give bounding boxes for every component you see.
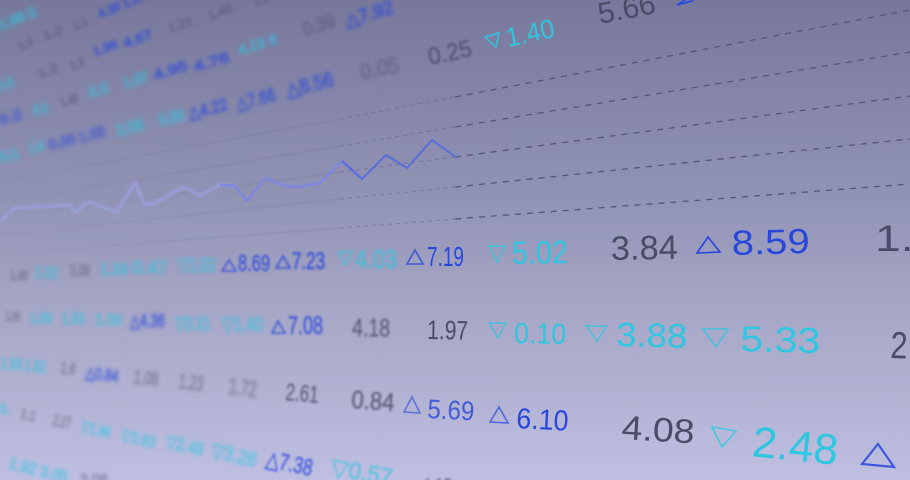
data row 3: 2.48 [750, 418, 841, 475]
second rising row: 2.2 [86, 79, 110, 100]
data row 5 [7, 455, 108, 480]
top row sharp values: 0.39 [157, 107, 186, 130]
second rising row [0, 0, 396, 128]
data row 2: 5.33 [740, 318, 821, 361]
data row 4: ▽3.26 [209, 440, 259, 472]
top row sharp values [0, 0, 698, 165]
top row sharp values: △7.66 [234, 85, 278, 114]
top row sharp values: △8.56 [284, 69, 336, 102]
third rising row: 1.3 [68, 55, 86, 73]
data row 4: ▽1.96 [79, 418, 112, 442]
trend guide lines [0, 10, 910, 254]
third rising row: 1.21 [166, 14, 195, 36]
data row 1: 8.59 [731, 222, 810, 263]
data row 3: 0.84 [351, 386, 396, 417]
data row 4: 5. [0, 401, 10, 417]
data row 2: 0.10 [514, 318, 566, 351]
data row 4: 2.27 [51, 412, 72, 433]
top row sharp values: 0.25 [426, 35, 474, 71]
data row 3: 5.69 [427, 394, 475, 426]
third rising row: 1.96 [91, 37, 120, 59]
data row 1: 5.02 [511, 234, 568, 271]
data row 2: △4.36 [130, 311, 165, 331]
third rising row: 1.46 [206, 0, 235, 23]
top row sharp values: 1.40 [503, 13, 557, 53]
top row sharp values: 2.05 [115, 117, 146, 140]
data row 4: ▽3.83 [119, 425, 158, 452]
data row 3: 1.99 1.92 [0, 353, 46, 377]
data row 2: 7.08 [288, 312, 323, 340]
second rising row: 0.1 [31, 99, 50, 118]
data row 1: 1.39 [100, 260, 128, 279]
data row 2: 3.88 [616, 316, 688, 356]
data row 3: 4.08 [621, 409, 696, 451]
data row 2: 4.18 [352, 314, 390, 343]
data row 2: ▽0.31 [175, 314, 210, 335]
data row 1: 4.03 [355, 244, 397, 274]
data row 3: 1.23 [177, 370, 205, 396]
data row 3: 1.72 [227, 373, 258, 402]
top row sharp values: 0.05 [358, 52, 401, 85]
data row 2: 1.58 [30, 310, 52, 327]
data row 1: 3.84 [610, 229, 678, 268]
fourth rising row: 1.1 [72, 16, 90, 33]
data row 3 [0, 353, 894, 475]
data row 2 [5, 309, 910, 369]
data row 1: 8.69 [238, 250, 270, 276]
third rising row [0, 0, 271, 93]
data row 1: 0.47 [132, 258, 168, 278]
second rising row: 1.48 [58, 90, 80, 110]
second rising row: 4.95 [151, 57, 190, 83]
data row 2: 1.09 [95, 312, 122, 329]
second rising row: 0.39 [300, 11, 338, 41]
data row 3: 2.61 [284, 379, 320, 409]
data row 1: 7.23 [292, 248, 325, 275]
data row 3: 1.6 [60, 358, 77, 379]
data row 1: 7.19 [427, 241, 464, 272]
data row 2: 1.06 [5, 309, 20, 324]
third rising row: 1.2 [36, 61, 60, 81]
data row 1: 3.08 [70, 261, 90, 280]
data row 3: 6.10 [516, 403, 569, 438]
second rising row: 4.76 [191, 49, 232, 76]
data row 1: ▽1.03 [178, 255, 215, 277]
data row 4: ▽2.48 [164, 431, 206, 460]
fourth rising row: 1.3 [17, 36, 35, 53]
third rising row: 4.67 [121, 26, 154, 51]
data row 1: 1.46 [10, 267, 28, 283]
top data rows [0, 0, 698, 165]
line chart [0, 140, 457, 222]
data row 3: △0.84 [85, 363, 120, 386]
data row 2: 1.97 [427, 315, 468, 346]
data row 3: 1.08 [132, 367, 160, 391]
data row 1: 1.02 [35, 265, 58, 282]
data row 2: ▽1.40 [222, 314, 263, 336]
second rising row: 1.37 [121, 68, 150, 91]
fourth rising row [0, 0, 148, 53]
top row sharp values: 1.4 [27, 137, 45, 156]
second rising row: 4.19 6 [236, 31, 279, 59]
data row 4: 1.1 [19, 405, 37, 425]
top row sharp values: △4.22 [186, 95, 230, 123]
data row 2: 1.93 [62, 311, 85, 328]
top row sharp values: 6.36 1.55 [47, 123, 107, 154]
fourth rising row: 1.2 [42, 24, 65, 43]
data row 4 [0, 401, 452, 480]
data row 1 [10, 218, 910, 283]
